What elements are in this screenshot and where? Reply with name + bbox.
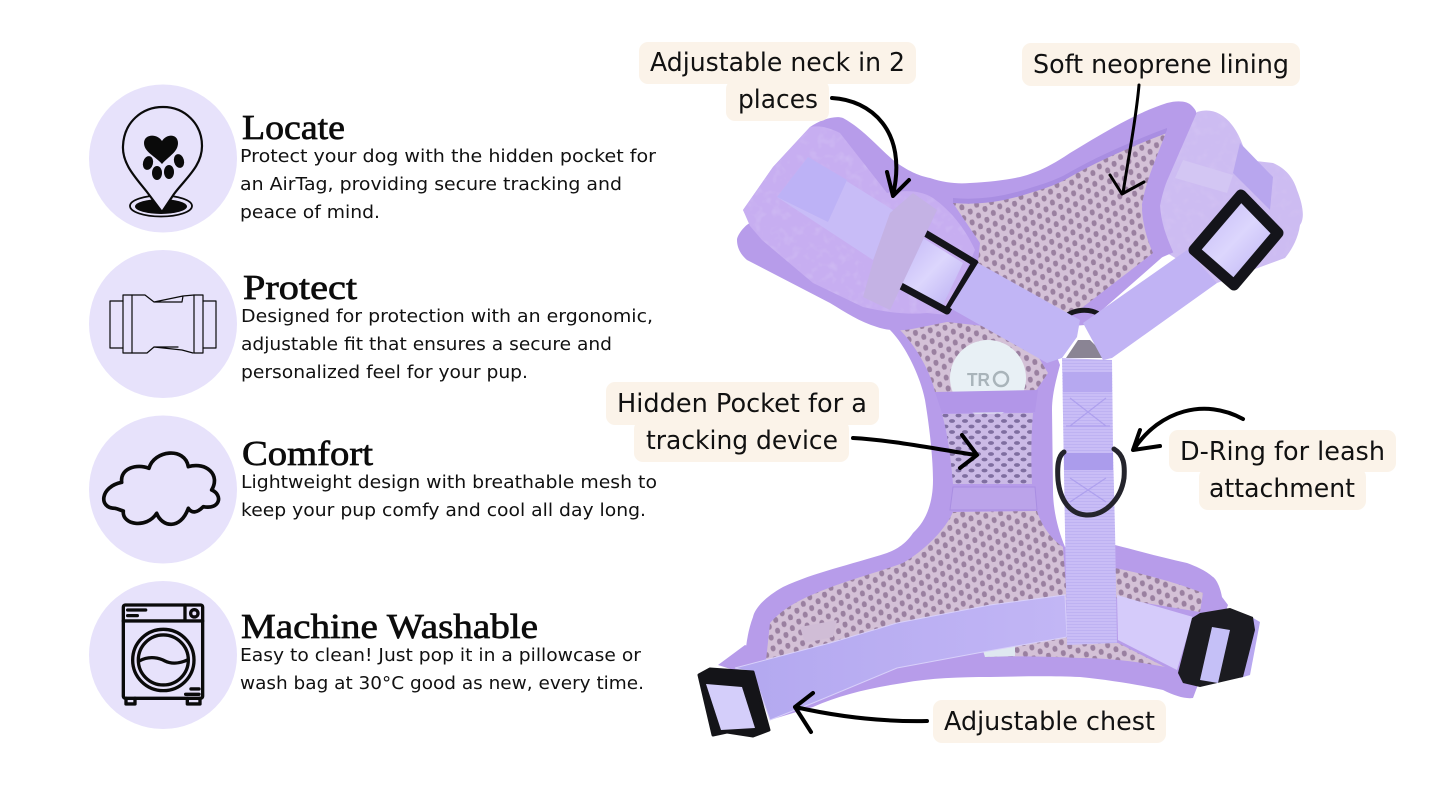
panel: comfort feature — [89, 416, 657, 564]
strap: left to center — [950, 263, 1080, 363]
text: protect description: adjustable fit that ensures a secure and — [241, 334, 612, 355]
heading: Comfort: Comfort — [242, 434, 373, 473]
right chest buckle — [1178, 608, 1260, 687]
panel: locate feature — [89, 84, 657, 232]
strap: left tail — [777, 157, 893, 260]
text: locate description: Protect your dog with the hidden pocket for — [240, 146, 657, 167]
callout: hidden pocket: tracking device — [646, 426, 838, 456]
icon circle: locate — [89, 84, 237, 232]
arrow: hidden pocket — [853, 435, 977, 468]
callout: D-ring: D-Ring for leash — [1180, 437, 1385, 467]
white label under chest strap — [983, 646, 1015, 657]
text: washable description — [240, 645, 644, 694]
fleece: right wing — [1159, 111, 1303, 283]
mesh: chest panel — [765, 511, 1067, 670]
heading: Locate: Locate — [242, 108, 345, 147]
tail: right strap — [1175, 160, 1233, 193]
text: locate description — [240, 146, 657, 223]
panel: machine washable feature — [89, 581, 644, 729]
strap: right to center — [1083, 250, 1217, 360]
icon: cloud — [104, 453, 219, 524]
airtag disc — [950, 340, 1026, 416]
arrow: adjustable neck — [832, 98, 909, 196]
mesh: neck panel — [953, 133, 1167, 315]
callout: soft neoprene lining: Soft neoprene lining — [1033, 50, 1289, 80]
callout: soft neoprene lining — [1022, 43, 1300, 86]
pocket top band — [935, 390, 1038, 413]
icon circle: machine washable — [89, 581, 237, 729]
arrow: D-ring — [1133, 409, 1243, 450]
text: locate description: an AirTag, providing secure tracking and — [240, 174, 622, 195]
icon: washing machine — [123, 605, 203, 704]
text: comfort description: Lightweight design with breathable mesh to — [241, 472, 657, 493]
icon: map pin with paw — [123, 107, 202, 216]
arrow: neoprene lining — [1110, 85, 1144, 194]
harness illustration — [699, 101, 1303, 736]
callout: hidden pocket: Hidden Pocket for a — [617, 389, 867, 419]
text: washable description: wash bag at 30°C good as new, every time. — [240, 673, 644, 694]
callout: adjustable chest — [933, 700, 1166, 743]
text: washable description: Easy to clean! Just pop it in a pillowcase or — [240, 645, 642, 666]
piping: right neck edge — [1151, 110, 1183, 256]
callout: D-ring: attachment — [1209, 474, 1355, 504]
text: protect description — [241, 306, 653, 383]
callout: adjustable neck: Adjustable neck in 2 — [650, 48, 905, 78]
text: protect description: personalized feel for your pup. — [241, 362, 528, 383]
mesh: right chest panel — [1115, 568, 1203, 612]
harness upper silhouette — [737, 101, 1197, 330]
text: comfort description — [241, 472, 657, 521]
neck inner shadow — [953, 128, 1167, 205]
vertical strap — [1062, 358, 1117, 645]
callout: hidden pocket — [606, 382, 879, 462]
mesh tab fabric — [800, 620, 837, 643]
centre wedge — [1066, 340, 1108, 358]
heading: Protect: Protect — [243, 268, 357, 307]
chest strap — [735, 595, 1067, 720]
arrow: adjustable chest — [795, 693, 927, 732]
pocket lower band — [950, 487, 1037, 510]
keeper loop — [863, 193, 937, 310]
mesh: waist upper — [900, 310, 1048, 392]
left shoulder buckle — [899, 230, 975, 311]
right shoulder buckle — [1194, 195, 1278, 285]
D-ring — [1058, 449, 1124, 515]
chest strap right section — [1117, 595, 1193, 670]
callout: adjustable neck — [639, 42, 916, 121]
text: locate description: peace of mind. — [240, 202, 380, 223]
mesh: bottom strip — [983, 637, 1165, 667]
callout: adjustable chest: Adjustable chest — [944, 707, 1155, 737]
airtag disc: TR — [967, 370, 990, 390]
left chest buckle — [699, 669, 769, 736]
strap stitched end — [777, 157, 847, 222]
pocket mesh — [942, 413, 1033, 484]
heading: Machine Washable: Machine Washable — [241, 607, 538, 646]
icon circle: comfort — [89, 416, 237, 564]
icon circle: protect — [89, 250, 237, 398]
icon: buckle — [110, 295, 216, 353]
text: protect description: Designed for protection with an ergonomic, — [241, 306, 653, 327]
panel: protect feature — [89, 250, 653, 398]
O-ring — [1064, 310, 1101, 319]
callout: D-ring — [1169, 430, 1396, 510]
harness lower silhouette — [745, 310, 1228, 720]
text: comfort description: keep your pup comfy and cool all day long. — [241, 500, 646, 521]
tail: right strap loop — [1233, 143, 1273, 210]
fleece: left wing — [743, 126, 975, 315]
strap tail behind left chest — [718, 645, 770, 672]
callout: adjustable neck: places — [738, 85, 818, 115]
